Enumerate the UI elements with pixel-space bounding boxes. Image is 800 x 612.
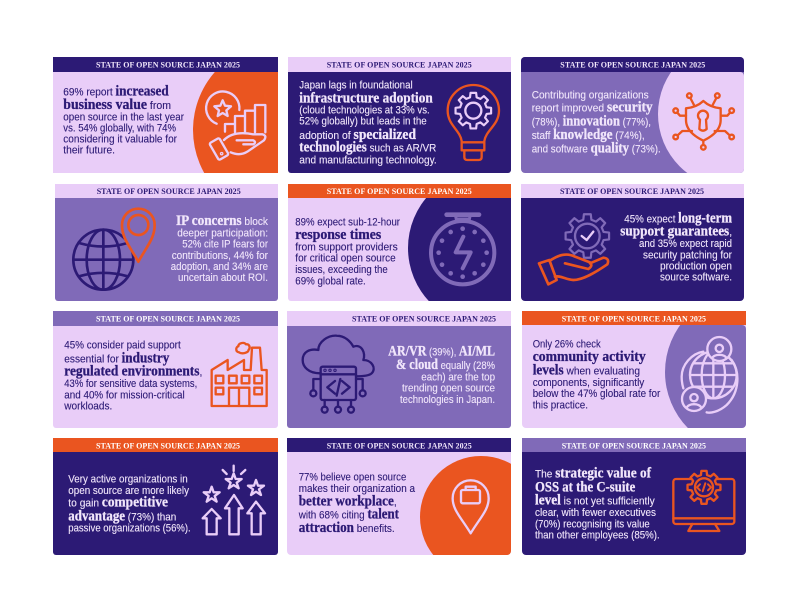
text block: contributions, 44% for [172,250,268,262]
orange circle background [420,456,511,555]
text block: advantage (73%) than [68,509,176,525]
text block [620,210,732,283]
panel: community activity [522,311,746,428]
header bar [287,438,511,452]
lilac circle background [658,72,744,173]
icon: factory [212,343,267,406]
text block: with 68% citing talent [298,507,399,523]
text block: regulated environments, [64,363,202,379]
text block [532,89,661,156]
text block: 69% report increased [63,84,169,100]
text block [299,79,437,166]
text block: Japan lags in foundational [299,79,413,91]
text block [533,339,661,411]
text block: production open [660,261,732,273]
header bar: STATE OF OPEN SOURCE JAPAN 2025 [562,441,706,450]
text block: source software. [660,271,732,283]
text block: 52% cite IP fears for [182,239,268,251]
text block: technologies such as AR/VR [299,140,436,156]
header bar: STATE OF OPEN SOURCE JAPAN 2025 [96,61,240,70]
text block [63,84,184,157]
header bar [522,311,746,325]
header bar [288,57,511,72]
text block: OSS at the C-suite [535,479,636,495]
header bar [55,184,278,198]
text block: community activity [533,349,646,365]
icon: light bulb with gear [448,85,499,160]
text block: vs. 54% globally, with 74% [63,122,176,134]
text block: response times [295,227,382,243]
text block: clear, with fewer executives [535,507,656,519]
text block: Very active organizations in [68,474,188,486]
header bar [522,438,746,452]
text block: level is not yet sufficiently [535,493,655,509]
icon: globe with location pin [73,209,155,290]
text block: attraction benefits. [299,520,395,536]
header bar: STATE OF OPEN SOURCE JAPAN 2025 [96,315,240,324]
text block: considering it valuable for [63,134,177,146]
text block: IP concerns block [176,213,268,229]
text block: 69% global rate. [295,275,366,287]
panel: response times [288,184,511,301]
text block: 45% expect long-term [624,210,732,226]
text block: than other employees (85%). [535,529,660,541]
text block [535,465,660,541]
text block: 89% expect sub-12-hour [295,217,400,229]
text block: infrastructure adoption [299,90,433,106]
text block: deeper participation: [177,227,268,239]
text block: and 40% for mission-critical [64,389,185,401]
icon: gear with check on hand [539,214,609,284]
header bar: STATE OF OPEN SOURCE JAPAN 2025 [96,441,240,450]
panel: industry regulated environments [53,311,278,428]
text block: to gain competitive [68,495,168,511]
text block: essential for industry [64,350,170,366]
text block: issues, exceeding the [295,264,388,276]
text block: adoption, and 34% are [171,261,268,273]
header bar: STATE OF OPEN SOURCE JAPAN 2025 [327,61,472,70]
panel: IP concerns [55,184,278,301]
text block: security patching for [643,249,732,261]
text block: for critical open source [295,253,396,265]
icon: cloud with code window [303,336,374,413]
icon: arrows and stars [203,466,265,534]
text block: and 35% expect rapid [639,238,732,250]
text block: workloads. [63,400,112,412]
text block: trending open source [402,383,495,395]
text block: their future. [63,145,115,157]
navy circle background [408,198,511,301]
text block: each) are the top [421,372,495,384]
header bar: STATE OF OPEN SOURCE JAPAN 2025 [562,315,706,324]
header bar [53,57,278,72]
icon: monitor with code gear [673,471,734,531]
text block: adoption of specialized [299,127,416,143]
icon: star, bars and hand [206,91,265,160]
text block: makes their organization a [299,483,416,495]
text block: (cloud technologies at 33% vs. [299,105,430,117]
text block: report improved security [532,100,653,116]
text block: (70%) recognising its value [535,518,650,530]
text block: uncertain about ROI. [178,272,268,284]
text block: (78%), innovation (77%), [532,114,651,130]
text block: below the 47% global rate for [533,388,661,400]
text block: 77% believe open source [299,472,406,484]
header bar: STATE OF OPEN SOURCE JAPAN 2025 [327,441,472,450]
icon: globe with people [682,337,737,413]
text block: this practice. [533,399,588,411]
panel: infrastructure adoption [288,57,511,173]
icon: stopwatch [431,215,494,284]
orange circle background [193,72,278,173]
text block: levels when evaluating [533,362,640,378]
panel: trending technologies [287,311,511,428]
text block: technologies in Japan. [400,394,495,406]
text block: 43% for sensitive data systems, [64,378,197,390]
text block: staff knowledge (74%), [532,127,645,143]
header bar [53,438,278,452]
header bar: STATE OF OPEN SOURCE JAPAN 2025 [560,61,705,70]
text block [295,217,400,287]
text block: and software quality (73%). [532,140,661,156]
icon: shield with keyhole and circuit [673,93,734,150]
purple circle background [665,325,746,428]
header bar: STATE OF OPEN SOURCE JAPAN 2025 [352,315,496,324]
text block: components, significantly [533,377,645,389]
header bar [287,311,511,326]
text block: open source are more likely [68,485,189,497]
icon: pin with briefcase [453,480,489,533]
text block: better workplace, [299,493,397,509]
text block: Contributing organizations [532,89,649,101]
header bar [521,184,744,198]
panel: contributing organizations [521,57,744,173]
panel: long-term support guarantees [521,184,744,301]
text block: AR/VR (39%), AI/ML [388,344,495,360]
text block: The strategic value of [535,465,651,481]
panel: better workplace [287,438,511,555]
header bar: STATE OF OPEN SOURCE JAPAN 2025 [327,187,472,196]
text block: and manufacturing technology. [299,154,437,166]
text block [171,213,268,284]
header bar: STATE OF OPEN SOURCE JAPAN 2025 [97,187,241,196]
header bar [53,311,278,326]
text block: 52% globally) but leads in the [299,116,427,128]
text block: 45% consider paid support [64,340,181,352]
text block: Only 26% check [533,339,601,351]
header bar [288,184,511,198]
panel: increased business value [53,57,278,173]
text block: support guarantees, [620,224,732,240]
header bar [521,57,744,72]
panel: competitive advantage [53,438,278,555]
text block: passive organizations (56%). [68,523,191,535]
text block: from support providers [295,241,398,253]
text block: open source in the last year [63,111,184,123]
panel: strategic value [522,438,746,555]
header bar: STATE OF OPEN SOURCE JAPAN 2025 [560,187,704,196]
text block [63,340,202,412]
text block: business value from [63,97,171,113]
text block: & cloud equally (28% [396,357,495,373]
text block [298,472,416,536]
text block [68,474,191,535]
text block [388,344,495,406]
